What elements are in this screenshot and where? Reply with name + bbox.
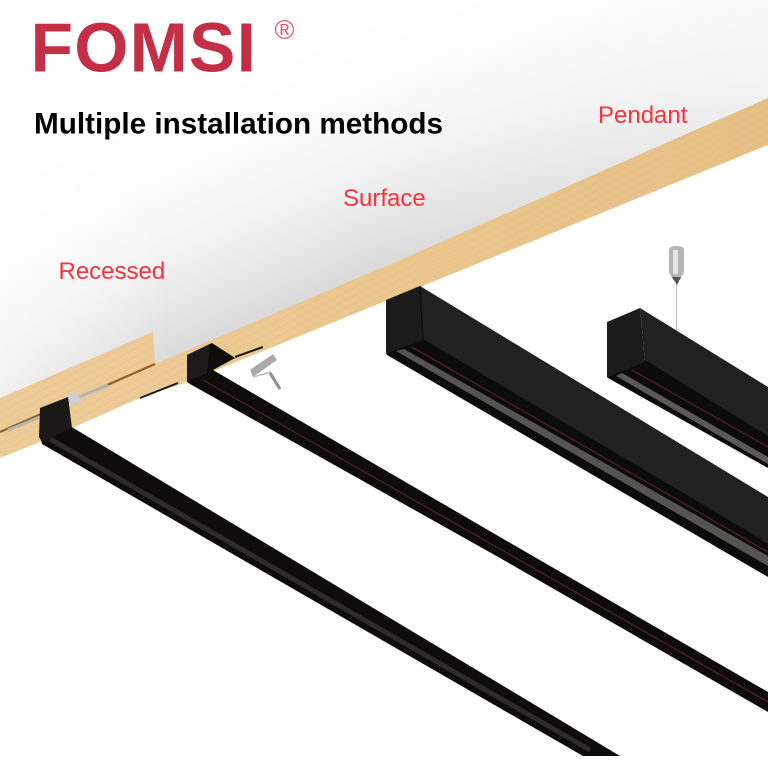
end face — [607, 308, 645, 377]
grey strip — [396, 349, 768, 566]
registered mark: ® — [274, 15, 294, 45]
logo: FOMSI: FOMSI — [30, 8, 257, 86]
pendant suspension — [669, 246, 684, 330]
flange strips — [140, 347, 263, 398]
grey strip — [616, 373, 768, 464]
red line — [412, 347, 768, 552]
underside channel — [386, 339, 768, 577]
side wall — [640, 308, 768, 437]
end face — [386, 286, 423, 353]
label: Surface: Surface — [343, 185, 426, 212]
track rail — [40, 426, 620, 756]
end cap — [187, 344, 210, 382]
wood grain — [0, 98, 768, 458]
cable — [676, 282, 678, 330]
flush track — [140, 343, 768, 712]
recess groove line — [0, 364, 155, 432]
surface track — [386, 286, 768, 577]
cable gripper — [669, 246, 684, 280]
label: Recessed: Recessed — [58, 258, 165, 285]
red line — [632, 370, 768, 447]
ceiling wood beam — [0, 98, 768, 458]
mounting clip bar — [8, 385, 108, 430]
copper conductor line — [203, 380, 768, 702]
label: Pendant: Pendant — [598, 102, 688, 129]
track rail — [187, 343, 768, 712]
paint roller icon — [250, 354, 280, 389]
end cap — [39, 397, 72, 442]
underside channel — [607, 360, 768, 468]
side wall — [420, 286, 768, 543]
heading: Multiple installation methods — [34, 108, 443, 140]
pendant track — [607, 308, 768, 468]
recessed track — [8, 385, 620, 756]
